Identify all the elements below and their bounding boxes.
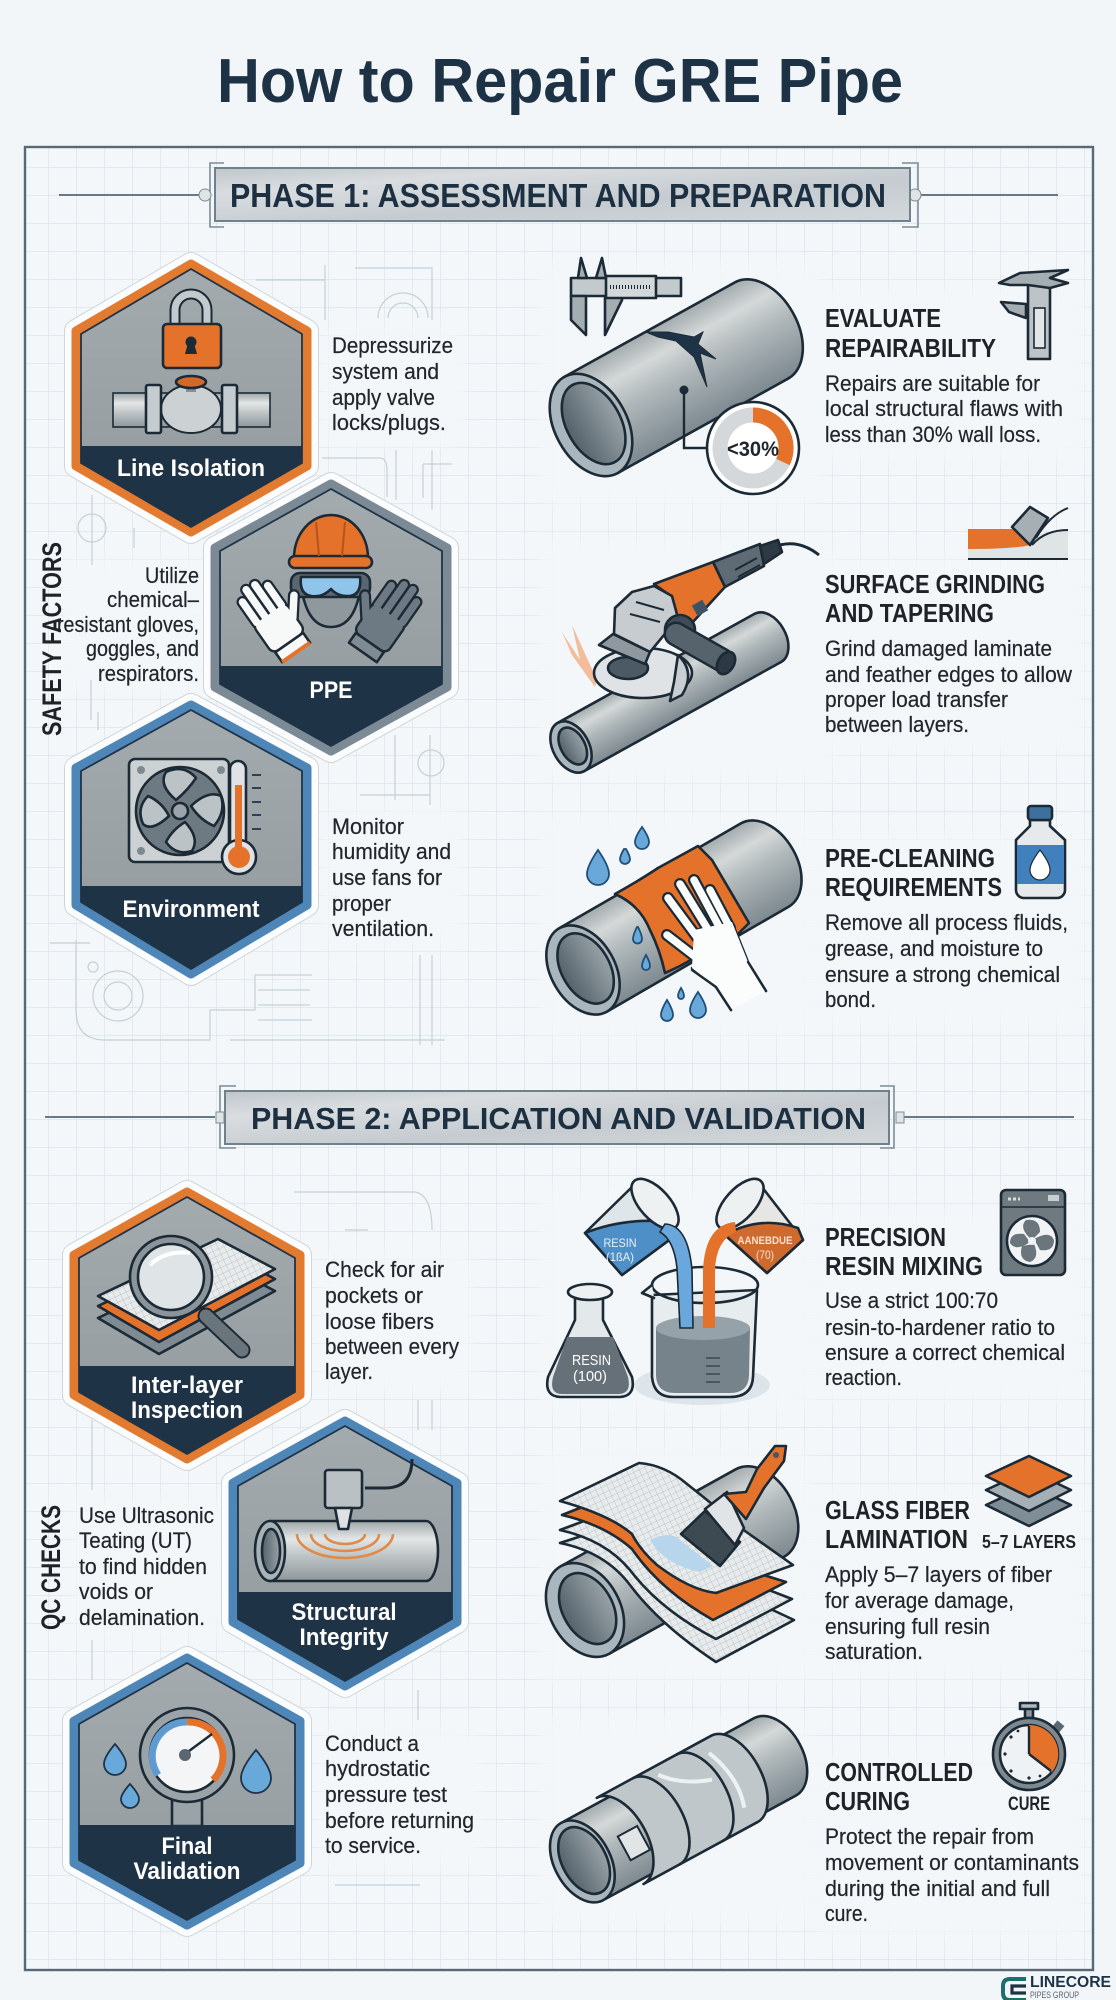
illustration: wrapped pipe curing — [534, 1701, 823, 1918]
pipe body — [531, 807, 817, 1028]
cloth — [615, 846, 749, 973]
icon: hard hat — [289, 515, 372, 568]
text: pre-cleaning: PRE-CLEANING — [825, 845, 995, 873]
text: final validation description: hydrostatic — [325, 1756, 430, 1781]
text: surface grinding: proper load transfer — [825, 687, 1008, 712]
text: line isolation description: Depressurize — [332, 333, 453, 358]
pipe body — [542, 605, 797, 780]
badge label: Validation — [134, 1858, 240, 1885]
icon: inspected pipe — [255, 1521, 438, 1581]
text: structural integrity description: delamination. — [79, 1605, 205, 1630]
illustration: angle grinder on pipe — [542, 540, 819, 780]
text: PPE description: goggles, and — [86, 636, 199, 661]
text: inter-layer inspection description: loose fibers — [325, 1309, 434, 1334]
text: surface grinding: AND TAPERING — [825, 600, 994, 628]
pouring streams — [660, 1222, 736, 1328]
text: precision resin mixing: RESIN MIXING — [825, 1253, 983, 1281]
flask with resin: RESIN — [572, 1352, 611, 1369]
text: glass fiber lamination: LAMINATION — [825, 1526, 968, 1554]
text: surface grinding — [825, 571, 1072, 737]
illustration: hand wiping pipe with cloth — [531, 807, 817, 1028]
left pour cup: resin: (1ßA) — [606, 1250, 634, 1264]
panel: final validation badge — [74, 1658, 300, 1925]
text: PPE description: chemical– — [107, 587, 200, 612]
text: environment description: humidity and — [332, 839, 451, 864]
side handle — [665, 615, 695, 645]
icon: layered sheets — [98, 1239, 275, 1354]
gauge: <30% — [727, 438, 779, 461]
text: final validation description: Conduct a — [325, 1731, 420, 1756]
badge label: PPE — [310, 677, 352, 704]
badge label: Structural — [292, 1599, 396, 1626]
flask with resin: (100) — [573, 1368, 607, 1385]
text: glass fiber lamination: for average damage, — [825, 1588, 1014, 1613]
text: surface grinding: and feather edges to allow — [825, 662, 1072, 687]
right pour cup: hardener — [708, 1171, 803, 1273]
text: structural integrity description: to find hidden — [79, 1554, 207, 1579]
text: PPE description — [57, 563, 200, 686]
text: environment description: use fans for — [332, 865, 442, 890]
text: final validation description: to service. — [325, 1833, 421, 1858]
text: structural integrity description — [79, 1503, 214, 1630]
badge label — [131, 1372, 243, 1424]
gauge — [707, 402, 799, 494]
text: final validation description: pressure test — [325, 1782, 447, 1807]
text: pre-cleaning: REQUIREMENTS — [825, 874, 1002, 902]
text: pre-cleaning — [825, 845, 1068, 1012]
text: PPE description: Utilize — [145, 563, 199, 588]
text: controlled curing: during the initial and full — [825, 1876, 1050, 1901]
text: environment description: proper — [332, 891, 391, 916]
icon: white glove — [234, 569, 323, 666]
text: precision resin mixing — [825, 1224, 1065, 1390]
text: glass fiber lamination: Apply 5–7 layers of fiber — [825, 1562, 1052, 1587]
badge label — [134, 1833, 240, 1885]
icon: caliper over pipe — [571, 258, 681, 335]
icon: padlock — [163, 294, 221, 368]
text: PPE description: respirators. — [98, 661, 199, 686]
badge label: Environment — [122, 896, 260, 923]
layers caption: 5–7 LAYERS — [982, 1532, 1076, 1552]
orange body — [654, 562, 725, 623]
text: evaluate repairability — [825, 305, 1063, 447]
text: structural integrity description: Use Ultrasonic — [79, 1503, 214, 1528]
text: surface grinding: between layers. — [825, 712, 969, 737]
icon: water drops — [104, 1744, 271, 1808]
badge label — [292, 1599, 396, 1651]
fiber sheets — [560, 1530, 794, 1662]
head — [614, 586, 678, 652]
text: pre-cleaning: ensure a strong chemical — [825, 962, 1060, 987]
icon: tapered laminate — [968, 507, 1068, 559]
text: surface grinding: SURFACE GRINDING — [825, 571, 1045, 599]
title: How to Repair GRE Pipe — [217, 47, 903, 116]
logo — [1003, 1974, 1111, 2000]
icon: ultrasonic probe — [325, 1459, 412, 1529]
badge label: Integrity — [300, 1624, 389, 1651]
right pour cup: hardener: (70) — [756, 1248, 774, 1262]
callout line — [684, 390, 713, 448]
icon: magnifier — [130, 1236, 242, 1350]
left pour cup: resin: RESIN — [604, 1236, 636, 1250]
text: line isolation description: apply valve — [332, 385, 435, 410]
phase 2 heading banner: PHASE 2: APPLICATION AND VALIDATION — [251, 1101, 866, 1136]
text: structural integrity description: Teating (UT) — [79, 1528, 192, 1553]
icon: ventilation fan — [129, 759, 229, 862]
gloved hand — [667, 880, 766, 1010]
text: final validation description — [325, 1731, 474, 1858]
text: precision resin mixing: reaction. — [825, 1365, 902, 1390]
logo: PIPES GROUP — [1030, 1990, 1079, 2000]
text: line isolation description — [332, 333, 453, 435]
text: inter-layer inspection description: layer. — [325, 1359, 373, 1384]
text: precision resin mixing: ensure a correct chemical — [825, 1340, 1065, 1365]
icon: stacked layers — [986, 1456, 1071, 1526]
phase 1 heading banner: PHASE 1: ASSESSMENT AND PREPARATION — [230, 177, 886, 214]
panel: line isolation badge — [76, 264, 307, 532]
phase 1 heading banner — [59, 163, 1058, 227]
badge label: Inspection — [131, 1397, 243, 1424]
panel: environment badge — [76, 705, 307, 974]
right pour cup: hardener: AANEBDUE — [738, 1235, 792, 1247]
text: evaluate repairability: REPAIRABILITY — [825, 335, 996, 363]
text: evaluate repairability: EVALUATE — [825, 305, 941, 333]
badge label: Final — [162, 1833, 212, 1860]
text: controlled curing — [825, 1759, 1079, 1926]
text: glass fiber lamination — [825, 1497, 1052, 1664]
icon: thermometer — [222, 761, 261, 874]
text: PPE description: resistant gloves, — [57, 612, 199, 637]
cure caption: CURE — [1008, 1794, 1050, 1815]
text: final validation description: before returning — [325, 1808, 474, 1833]
badge label: Inter-layer — [131, 1372, 243, 1399]
text: inter-layer inspection description: Check for air — [325, 1257, 444, 1282]
panel: structural integrity badge — [233, 1421, 457, 1686]
icon: mixer machine — [1001, 1190, 1065, 1275]
motor housing — [713, 544, 764, 587]
pipe body — [530, 1453, 814, 1671]
text: evaluate repairability: less than 30% wall loss. — [825, 422, 1041, 447]
text: inter-layer inspection description: pockets or — [325, 1283, 423, 1308]
text: controlled curing: CONTROLLED — [825, 1759, 973, 1787]
paint brush — [681, 1446, 786, 1566]
phase 2 heading banner — [45, 1086, 1074, 1148]
panel: inter-layer inspection badge — [74, 1192, 300, 1459]
text: inter-layer inspection description: between every — [325, 1334, 459, 1359]
guard disc — [594, 648, 692, 698]
icon: goggles and face — [291, 573, 370, 627]
flask with resin — [547, 1284, 633, 1397]
text: environment description — [332, 814, 451, 941]
QC checks vertical label: QC CHECKS — [36, 1505, 66, 1630]
text: environment description: ventilation. — [332, 916, 434, 941]
text: glass fiber lamination: saturation. — [825, 1639, 923, 1664]
text: glass fiber lamination: GLASS FIBER — [825, 1497, 970, 1525]
text: controlled curing: Protect the repair from — [825, 1824, 1034, 1849]
text: line isolation description: system and — [332, 359, 439, 384]
pipe body — [533, 265, 820, 491]
badge label: Line Isolation — [117, 455, 265, 482]
icon: cleaning bottle — [1016, 806, 1065, 898]
icon: caliper — [999, 270, 1068, 359]
text: precision resin mixing: Use a strict 100:70 — [825, 1288, 998, 1313]
beaker — [642, 1267, 758, 1397]
text: structural integrity description: voids or — [79, 1579, 153, 1604]
left pour cup: resin — [585, 1171, 687, 1275]
sparks — [551, 625, 597, 687]
illustration: glass fiber lamination — [530, 1446, 814, 1671]
illustration: resin mixing — [547, 1171, 803, 1405]
text: precision resin mixing: PRECISION — [825, 1224, 946, 1252]
icon: grey glove — [338, 569, 425, 664]
text: evaluate repairability: Repairs are suitable for — [825, 371, 1040, 396]
icon: stopwatch — [993, 1703, 1065, 1790]
icon: pressure gauge — [140, 1708, 234, 1802]
text: pre-cleaning: bond. — [825, 987, 876, 1012]
text: evaluate repairability: local structural flaws with — [825, 396, 1063, 421]
text: surface grinding: Grind damaged laminate — [825, 636, 1052, 661]
text: inter-layer inspection description — [325, 1257, 459, 1384]
safety factors vertical label: SAFETY FACTORS — [37, 542, 67, 736]
text: precision resin mixing: resin-to-hardener ratio to — [825, 1315, 1055, 1340]
text: controlled curing: movement or contaminants — [825, 1850, 1079, 1875]
icon: valve on pipe — [113, 376, 270, 433]
illustration: damaged pipe with wall loss gauge — [533, 258, 820, 494]
text: controlled curing: CURING — [825, 1788, 910, 1816]
text: environment description: Monitor — [332, 814, 404, 839]
text: glass fiber lamination: ensuring full resin — [825, 1614, 990, 1639]
crack — [646, 332, 716, 387]
text: pre-cleaning: grease, and moisture to — [825, 936, 1043, 961]
text: line isolation description: locks/plugs. — [332, 410, 446, 435]
water drops — [587, 827, 706, 1021]
panel: PPE badge — [215, 484, 447, 751]
text: pre-cleaning: Remove all process fluids, — [825, 910, 1068, 935]
text: controlled curing: cure. — [825, 1901, 868, 1926]
logo: LINECORE — [1030, 1974, 1111, 1991]
